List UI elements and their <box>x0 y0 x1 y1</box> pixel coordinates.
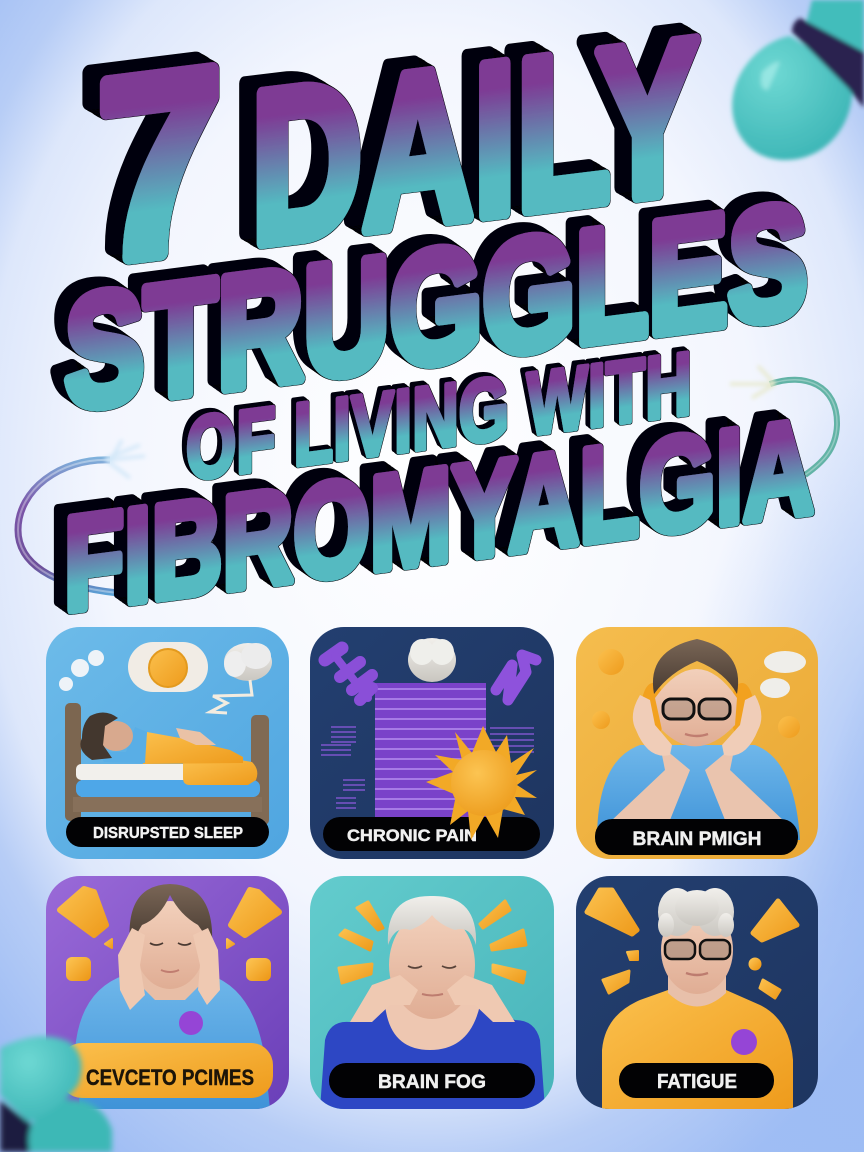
title line: STRUGGLES: STRUGGLES <box>65 170 808 444</box>
label: brain pmigh <box>595 819 798 855</box>
icon: blurred capsule bottom left <box>0 1036 112 1152</box>
icon: purple dumbbell left <box>325 648 372 700</box>
icon: cloud and lightning <box>210 643 272 713</box>
panel: chronic pain <box>310 627 554 859</box>
title line: 7 DAILY <box>97 0 699 316</box>
panel: fatigue <box>576 876 818 1109</box>
icon: brain <box>408 638 456 682</box>
title <box>64 0 814 639</box>
figure: person in yellow sweater <box>602 888 793 1109</box>
icon: purple squiggle right <box>496 655 536 700</box>
title line: 7 DAILY: DAILY <box>251 0 699 290</box>
label: cevceto pcimes: CEVCETO PCIMES <box>86 1065 254 1090</box>
icon: yellow spiky sun <box>426 726 537 840</box>
icon: purple stacked coil <box>375 683 486 821</box>
panel: disrupted sleep <box>46 627 289 859</box>
icon: nerve tube left <box>18 440 145 593</box>
figure: woman with glasses holding head <box>597 639 800 840</box>
title line: FIBROMYALGIA: FIBROMYALGIA <box>64 390 814 639</box>
label: brain pmigh: BRAIN PMIGH <box>632 829 762 850</box>
figure: woman holding head <box>75 884 270 1109</box>
icon: clouds <box>760 651 806 698</box>
icon: small coils <box>321 727 534 808</box>
title line: 7 DAILY: 7 <box>97 14 222 316</box>
figure: person rubbing eyes <box>320 896 545 1109</box>
label: brain fog: BRAIN FOG <box>378 1072 486 1093</box>
title line: OF LIVING WITH: OF LIVING WITH <box>186 332 692 499</box>
icon: sleep letters <box>59 650 104 691</box>
panel: headache <box>46 876 289 1109</box>
label: fatigue: FATIGUE <box>657 1071 737 1093</box>
icon: bed with sleeping person <box>65 703 269 825</box>
label: cevceto pcimes <box>60 1043 273 1098</box>
icon: orange shards <box>60 889 279 978</box>
label: chronic pain <box>323 817 540 851</box>
panel: brain pain <box>576 627 818 859</box>
label: fatigue <box>619 1063 774 1098</box>
label: brain fog <box>329 1063 535 1098</box>
label: chronic pain: CHRONIC PAIN <box>347 826 477 845</box>
panel: brain fog <box>310 876 554 1109</box>
icon: orange balls <box>592 649 800 738</box>
icon: pill sign with coin <box>128 642 208 692</box>
icon: orange cones <box>587 890 797 998</box>
icon: nerve tube right <box>730 366 837 475</box>
label: disrupted sleep <box>66 817 269 847</box>
icon: blurred capsule top right <box>732 0 864 160</box>
label: disrupted sleep: DISRUPSTED SLEEP <box>93 825 243 842</box>
icon: orange rays <box>339 901 526 983</box>
